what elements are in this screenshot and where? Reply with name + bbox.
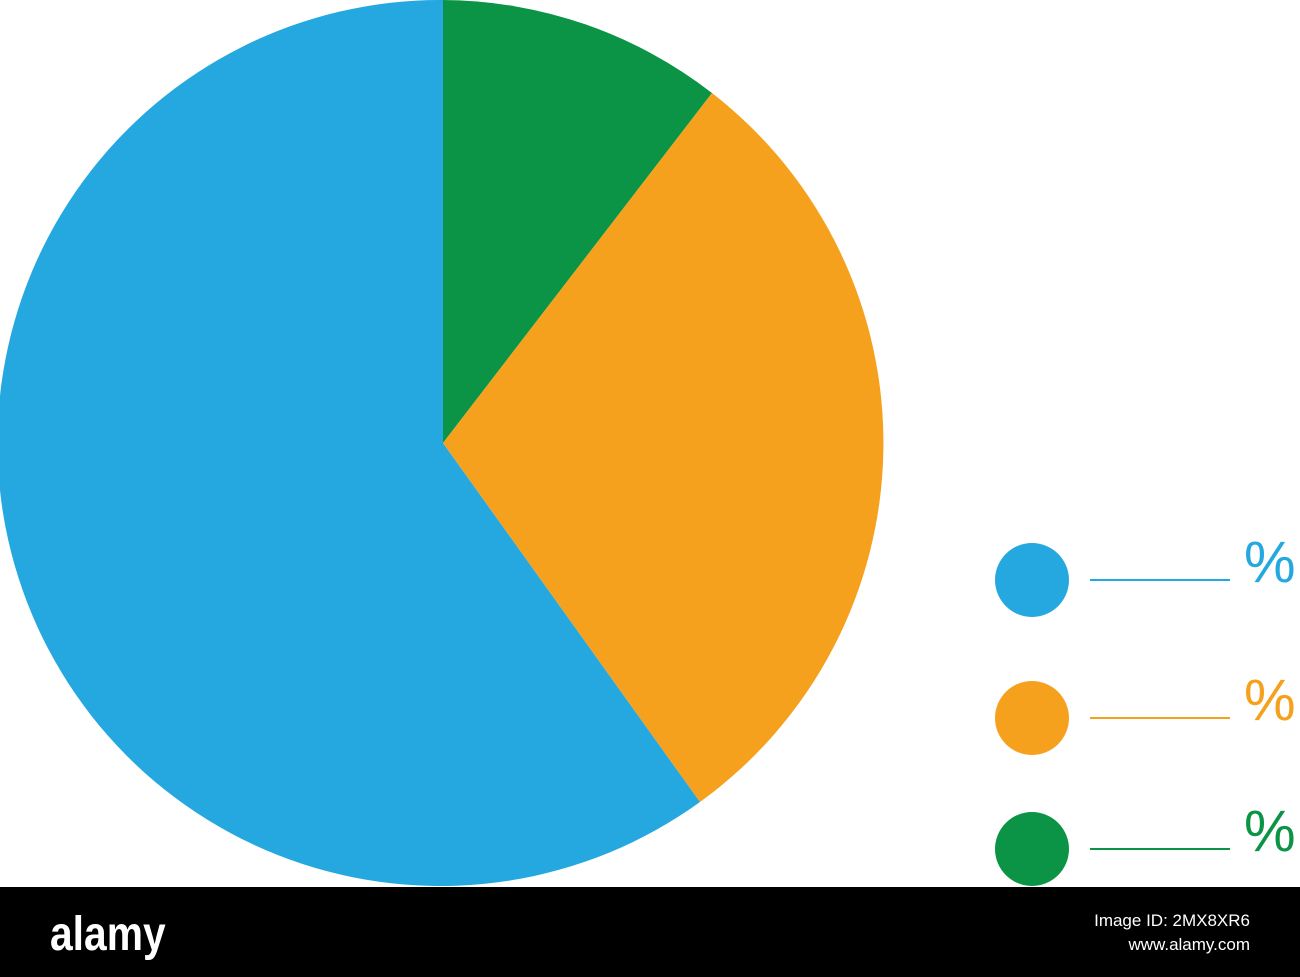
- footer bar: [0, 887, 1300, 977]
- legend item: green: [995, 799, 1296, 886]
- legend: [995, 530, 1296, 886]
- slice: blue: [0, 0, 700, 886]
- legend item: orange: [995, 668, 1296, 755]
- legend item: green: %: [1244, 799, 1296, 864]
- slice: green: [443, 0, 712, 443]
- footer image id: Image ID: 2MX8XR6: [1094, 911, 1250, 930]
- legend item: blue: %: [1244, 530, 1296, 595]
- footer logo: alamy: [50, 908, 166, 961]
- pie chart: [0, 0, 883, 886]
- footer url: www.alamy.com: [1127, 935, 1250, 954]
- legend item: orange: %: [1244, 668, 1296, 733]
- legend item: blue: [995, 530, 1296, 617]
- slice: orange: [443, 93, 883, 802]
